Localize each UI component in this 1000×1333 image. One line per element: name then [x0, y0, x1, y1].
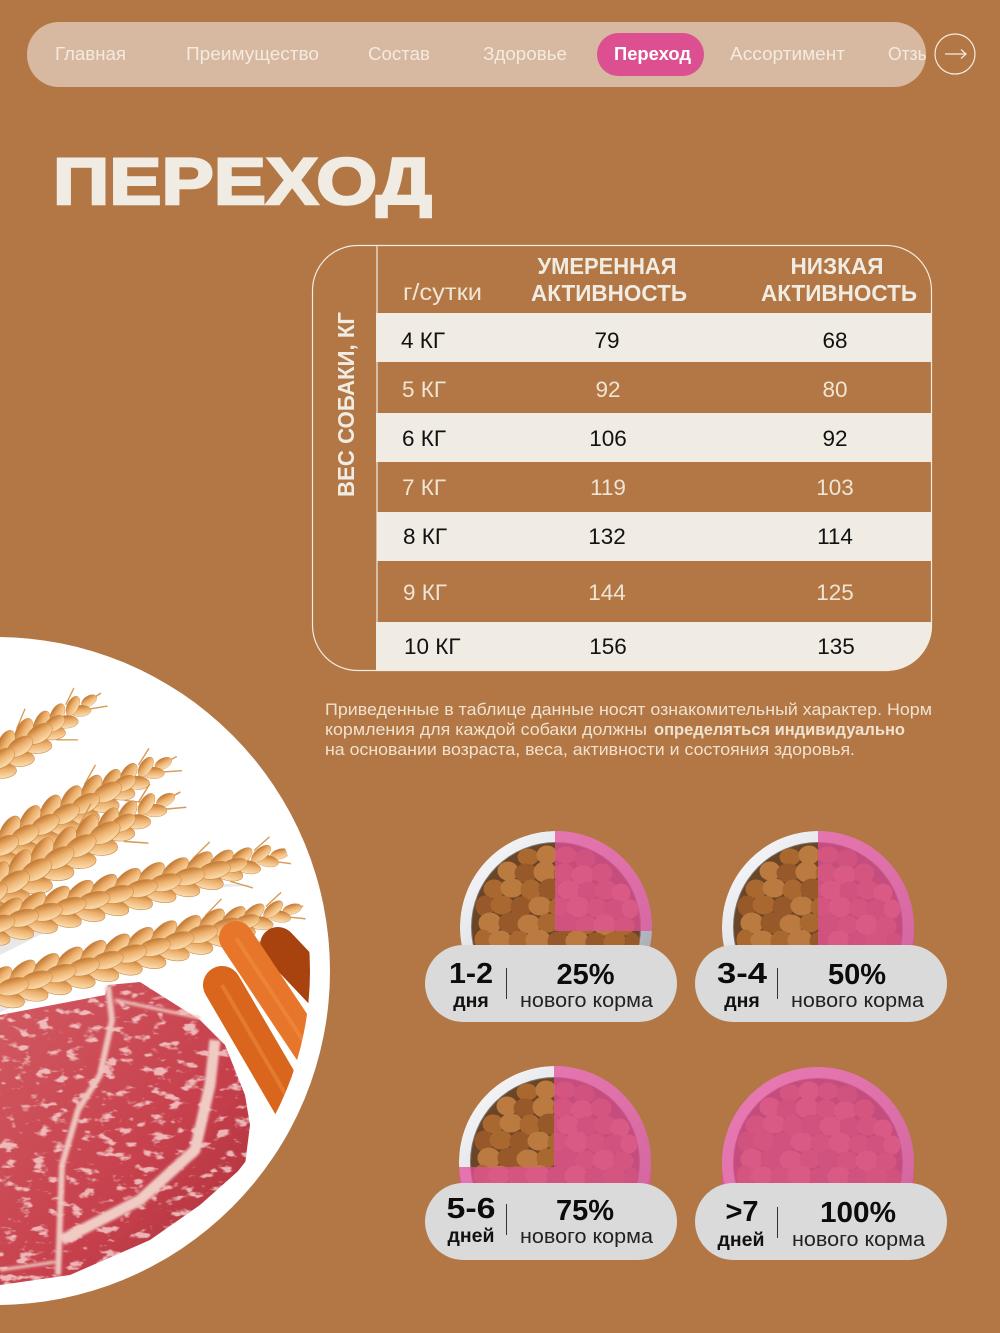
table values: 4 КГ: [401, 328, 445, 353]
label: days 5-6, 75%: [425, 1183, 677, 1260]
table header: АКТИВНОСТЬ: [761, 280, 917, 306]
nav items: Главная: [55, 44, 126, 64]
bowl: 100%: [722, 1067, 914, 1185]
bowl: 25%: [460, 831, 652, 947]
label: days 1-2, 25%: нового корма: [520, 990, 654, 1012]
table values: 68: [822, 328, 848, 353]
nav items: Ассортимент: [730, 44, 845, 64]
label: days 5-6, 75%: 75%: [556, 1195, 614, 1227]
table values: 7 КГ: [402, 475, 446, 500]
feeding table: [312, 245, 932, 670]
table values: 5 КГ: [402, 377, 446, 402]
pink overlay half: [818, 831, 914, 946]
label: days 3-4, 50%: 50%: [828, 959, 886, 991]
table values: 119: [590, 475, 626, 500]
table values: 114: [817, 524, 853, 549]
label: days 1-2, 25%: [425, 945, 677, 1022]
table values: 10 КГ: [404, 634, 461, 659]
table values: 132: [588, 524, 626, 549]
table values: 92: [595, 377, 621, 402]
disclaimer note: [325, 701, 932, 759]
icon: meat steak: [0, 982, 250, 1285]
table values: 106: [589, 426, 627, 451]
disclaimer note: определяться индивидуально: [654, 721, 905, 739]
table values: 144: [588, 580, 626, 605]
pink overlay full: [722, 1067, 914, 1185]
label: days 1-2, 25%: дня: [453, 990, 489, 1012]
table values: 8 КГ: [403, 524, 447, 549]
label: days 5-6, 75%: нового корма: [520, 1226, 654, 1248]
icon: next arrow: [935, 34, 975, 74]
table values: 9 КГ: [403, 580, 447, 605]
icon: wheat ears: [0, 688, 306, 1008]
bowl: 50%: [722, 831, 914, 946]
label: more than 7 days, 100%: дней: [718, 1229, 764, 1251]
label: days 1-2, 25%: 25%: [556, 959, 615, 991]
nav items: Преимущество: [186, 44, 319, 64]
label: more than 7 days, 100%: >7: [725, 1196, 759, 1228]
table header: АКТИВНОСТЬ: [531, 280, 687, 306]
table values: 80: [822, 377, 848, 402]
disclaimer note: кормления для каждой собаки должны: [325, 721, 647, 739]
label: days 1-2, 25%: 1-2: [449, 958, 493, 990]
disclaimer note: Приведенные в таблице данные носят ознакомительный характер. Норм: [325, 701, 932, 719]
table frame: [312, 245, 932, 670]
label: days 3-4, 50%: нового корма: [791, 990, 925, 1012]
disclaimer note: на основании возраста, веса, активности и состояния здоровья.: [325, 741, 855, 759]
bowl: 75%: [459, 1066, 651, 1185]
table values: 135: [817, 634, 855, 659]
pink overlay quadrant: [555, 827, 655, 931]
label: more than 7 days, 100%: нового корма: [792, 1229, 926, 1251]
title: ПЕРЕХОД: [53, 144, 432, 218]
active nav pill: [597, 33, 704, 76]
label: days 5-6, 75%: дней: [448, 1225, 494, 1247]
label: more than 7 days, 100%: [695, 1183, 947, 1260]
icon: carrots: [222, 938, 330, 1105]
table values: 103: [816, 475, 854, 500]
navigation bar: [27, 22, 952, 87]
label: days 3-4, 50%: [695, 945, 947, 1022]
nav items: Состав: [368, 44, 430, 64]
label: more than 7 days, 100%: 100%: [820, 1197, 896, 1229]
label: days 5-6, 75%: 5-6: [446, 1193, 496, 1225]
photo circle: wheat, meat, carrots: [0, 637, 341, 1305]
table values: 6 КГ: [402, 426, 446, 451]
table header: [403, 253, 917, 306]
table values: 79: [594, 328, 620, 353]
nav items: Отзывы: [888, 44, 952, 64]
table values: 125: [816, 580, 854, 605]
nav items: Переход: [614, 44, 692, 64]
table rows background: [376, 313, 932, 670]
table header: г/сутки: [403, 279, 482, 305]
nav items: Здоровье: [483, 44, 567, 64]
vertical axis label: ВЕС СОБАКИ, КГ: [333, 312, 359, 497]
table values: 156: [589, 634, 627, 659]
table values: [401, 328, 855, 659]
table header: НИЗКАЯ: [790, 253, 884, 279]
pink overlay three quarters: [459, 1066, 651, 1185]
nav items: [56, 47, 926, 64]
wheat shadows: [0, 775, 255, 1012]
label: days 3-4, 50%: 3-4: [717, 958, 767, 990]
table header: УМЕРЕННАЯ: [538, 253, 676, 279]
label: days 3-4, 50%: дня: [724, 990, 760, 1012]
table values: 92: [822, 426, 848, 451]
